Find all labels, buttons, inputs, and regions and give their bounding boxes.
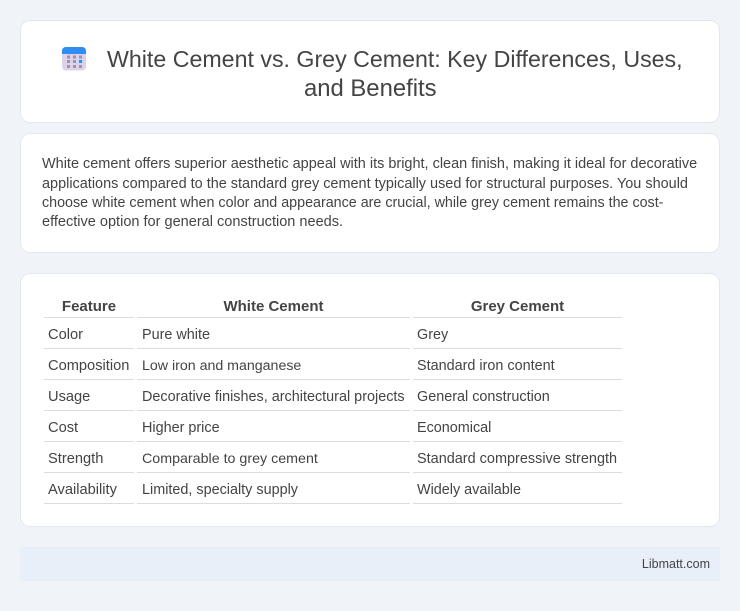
header: Grey Cement: Grey Cement [471,298,564,315]
title [107,46,683,102]
row: Strength: Comparable to grey cement [142,451,318,467]
row: Usage: Decorative finishes, architectural projects [142,389,405,405]
row: Color: Pure white [142,327,210,343]
footer bar [20,547,720,581]
title: and Benefits [304,75,437,102]
row: Composition [48,358,555,374]
row: Usage: Usage [48,389,90,405]
row: Color: Grey [417,327,448,343]
intro text [42,156,697,230]
row: Composition: Composition [48,358,129,374]
panel: comparison table [20,273,720,527]
row: Cost [48,420,491,436]
row: Color: Color [48,327,83,343]
row: Usage: General construction [417,389,550,405]
row: Availability: Availability [48,482,117,498]
header: Feature: Feature [62,298,116,315]
row: Availability [48,482,521,498]
icon: calendar [62,47,86,70]
row: Composition: Low iron and manganese [142,358,301,374]
row: Availability: Limited, specialty supply [142,482,298,498]
panel: title card [20,20,720,123]
title: White Cement vs. Grey Cement: Key Differences, Uses, [107,46,683,72]
row: Strength: Standard compressive strength [417,451,617,467]
header: White Cement: White Cement [223,298,324,315]
intro text: effective option for general construction needs. [42,214,343,230]
row: Cost: Cost [48,420,78,436]
row: Cost: Higher price [142,420,220,436]
intro text: choose white cement when color and appearance are crucial, while grey cement remains the cost- [42,195,663,211]
table [44,298,622,504]
row: Availability: Widely available [417,482,521,498]
row: Strength: Strength [48,451,103,467]
row: Color [48,327,448,343]
intro text: White cement offers superior aesthetic appeal with its bright, clean finish, making it ideal for decorative [42,156,697,172]
footer text: Libmatt.com: Libmatt.com [642,557,710,571]
panel: introduction [20,133,720,253]
intro text: applications compared to the standard grey cement typically used for structural purposes. You should [42,176,688,192]
row: Cost: Economical [417,420,491,436]
row: Usage [48,389,550,405]
row: Strength [48,451,617,467]
row: Composition: Standard iron content [417,358,555,374]
